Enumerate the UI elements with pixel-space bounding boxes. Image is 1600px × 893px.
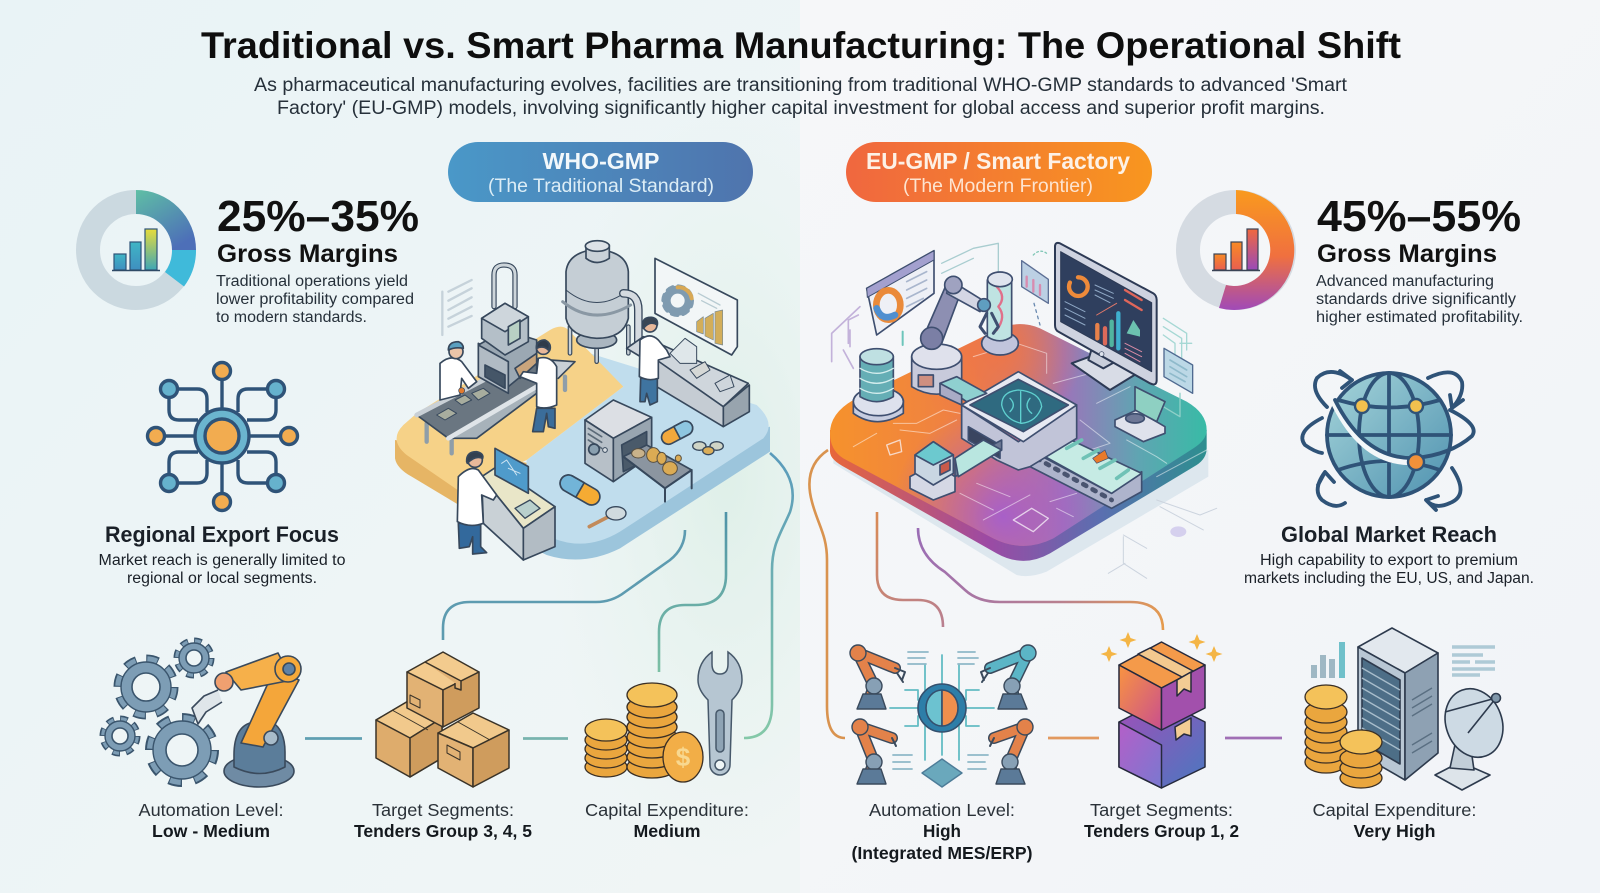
wrench <box>698 652 742 775</box>
regional export focus text: regional or local segments. <box>127 570 317 587</box>
wall monitor <box>655 258 737 355</box>
connector: segments right inner <box>877 512 943 627</box>
worker blue cap <box>440 342 477 400</box>
labels: smart bottom: Target Segments: <box>1090 800 1233 820</box>
stat: 25-35 gross margins: lower profitability compared <box>216 291 414 308</box>
labels: smart bottom: Capital Expenditure: <box>1312 800 1476 820</box>
robot arms <box>858 653 1028 775</box>
icon: robots and AI brain <box>850 645 1036 787</box>
labels: traditional bottom: Low - Medium <box>152 821 270 841</box>
small panel top <box>1022 251 1048 325</box>
platform base <box>830 324 1217 578</box>
reactor cylinder <box>982 272 1018 355</box>
global market reach text: High capability to export to premium <box>1260 552 1518 569</box>
stat: 45-55 gross margins: Advanced manufacturing <box>1316 273 1494 290</box>
labels: traditional bottom: Target Segments: <box>372 800 514 820</box>
oven machine <box>585 400 692 502</box>
large monitor <box>1055 243 1157 390</box>
labels: smart bottom: (Integrated MES/ERP) <box>852 843 1032 863</box>
stat: 45-55 gross margins: standards drive significantly <box>1316 291 1516 308</box>
icon: gradient boxes <box>1100 632 1222 788</box>
capsule lower <box>557 472 603 508</box>
dish <box>1435 681 1512 790</box>
global market reach text: markets including the EU, US, and Japan. <box>1244 570 1534 587</box>
regional export focus text <box>98 522 346 587</box>
icon: globe <box>1302 371 1474 510</box>
icon: server, coins, satellite dish <box>1305 628 1512 790</box>
icon: gears and orange robot <box>103 641 301 787</box>
labels: smart bottom: Very High <box>1354 821 1436 841</box>
chart bars and text lines <box>1314 642 1495 678</box>
labels: traditional bottom: Automation Level: <box>138 800 284 820</box>
small machine <box>910 442 955 500</box>
coin stacks <box>585 683 677 778</box>
regional export focus text: Regional Export Focus <box>105 522 339 547</box>
brain scanner <box>962 372 1077 470</box>
server <box>1358 628 1438 780</box>
regional export focus text: Market reach is generally limited to <box>98 552 346 569</box>
database <box>853 349 903 422</box>
coin stacks right <box>1305 685 1382 788</box>
floating notes left <box>832 307 860 368</box>
global market reach text: Global Market Reach <box>1281 522 1497 547</box>
labels: smart bottom: Tenders Group 1, 2 <box>1084 821 1239 841</box>
stat: 25-35 gross margins: to modern standards. <box>216 309 367 326</box>
scientist at counter <box>639 317 670 405</box>
badge: WHO-GMP: WHO-GMP <box>542 148 660 174</box>
counter <box>627 337 749 427</box>
icon: coins and wrench: $ <box>676 742 691 772</box>
brain <box>918 684 966 732</box>
tablet kiosk <box>1115 387 1165 442</box>
stat: 45-55 gross margins: 45%–55% <box>1317 192 1521 241</box>
stat: 45-55 gross margins <box>1316 192 1523 326</box>
subtitle: Factory' (EU-GMP) models, involving significantly higher capital investment for global access and superior profit margins. <box>277 98 1325 119</box>
donut: traditional margins <box>88 190 196 298</box>
illustration: smart factory platform <box>830 243 1217 578</box>
labels: smart bottom: Automation Level: <box>869 800 1015 820</box>
connector: capex left <box>659 512 726 672</box>
title: Traditional vs. Smart Pharma Manufacturing: The Operational Shift <box>201 25 1401 66</box>
robot <box>192 653 301 787</box>
tank <box>563 241 638 362</box>
platform base <box>395 327 770 560</box>
right conveyor <box>1030 430 1142 508</box>
icon: regional network <box>148 362 298 510</box>
pressing machine <box>478 265 537 393</box>
connector: segments left <box>443 530 685 640</box>
text bars <box>893 652 988 769</box>
connector: automation right <box>809 450 845 738</box>
badge: WHO-GMP <box>448 142 753 202</box>
stat: 25-35 gross margins: Gross Margins <box>217 240 398 268</box>
subtitle: As pharmaceutical manufacturing evolves, facilities are transitioning from traditional WHO-GMP standards to advanced 'Smart <box>254 75 1348 96</box>
badge: EU-GMP <box>846 142 1152 202</box>
dashes between bottom icons <box>305 737 1282 740</box>
data window left <box>867 251 934 335</box>
stat: 25-35 gross margins: 25%–35% <box>217 192 419 241</box>
labels: traditional bottom <box>138 800 749 841</box>
labels: traditional bottom: Tenders Group 3, 4, 5 <box>354 821 532 841</box>
labels: smart bottom: High <box>923 821 961 841</box>
magnifier <box>589 507 626 527</box>
labels: traditional bottom: Capital Expenditure: <box>585 800 749 820</box>
stat: 25-35 gross margins <box>216 192 419 326</box>
circuit traces <box>890 655 994 760</box>
icon: cardboard boxes <box>376 652 509 787</box>
icon: coins and wrench <box>585 683 703 782</box>
badge: WHO-GMP: (The Traditional Standard) <box>488 176 714 197</box>
labels: traditional bottom: Medium <box>634 821 700 841</box>
document lines <box>442 280 472 335</box>
robot arm <box>912 276 998 394</box>
stat: 45-55 gross margins: higher estimated profitability. <box>1316 309 1523 326</box>
donut: smart margins <box>1188 190 1294 310</box>
connector: segments right outer <box>918 528 1163 630</box>
conveyor <box>417 360 575 453</box>
subtitle <box>254 75 1348 119</box>
badge: EU-GMP: (The Modern Frontier) <box>903 176 1093 197</box>
floating lines and panel right <box>1163 318 1193 417</box>
desk with computer <box>457 448 555 560</box>
labels: smart bottom <box>852 800 1476 863</box>
capsule upper <box>659 419 723 455</box>
badge: EU-GMP: EU-GMP / Smart Factory <box>866 148 1130 174</box>
chip <box>922 759 962 787</box>
gears <box>103 641 214 782</box>
left conveyor <box>940 377 1002 477</box>
global market reach text <box>1244 522 1534 587</box>
circuit top <box>942 243 998 273</box>
worker at conveyor <box>520 340 557 432</box>
stat: 45-55 gross margins: Gross Margins <box>1317 240 1497 268</box>
stat: 25-35 gross margins: Traditional operations yield <box>216 273 408 290</box>
connector: automation left <box>744 453 793 738</box>
illustration: traditional factory platform <box>395 241 770 560</box>
